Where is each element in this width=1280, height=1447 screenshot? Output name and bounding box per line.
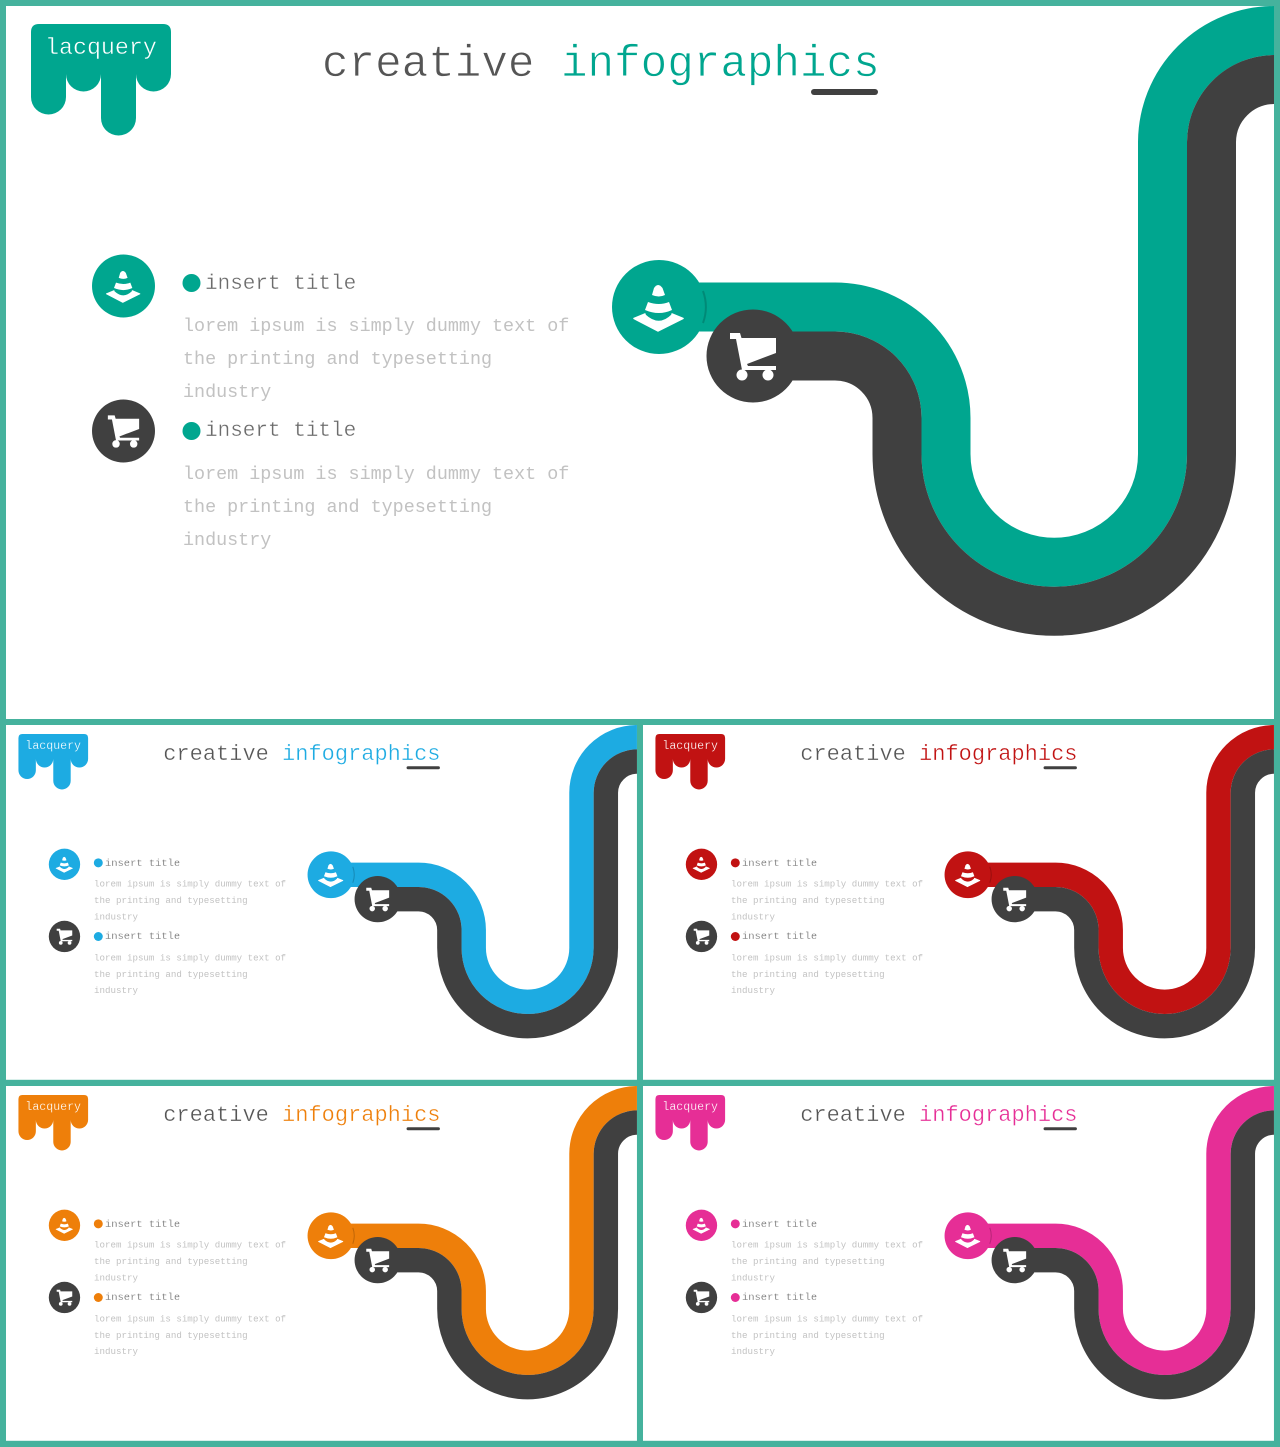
text block 1: the printing and typesetting	[94, 895, 248, 906]
panel: pink	[643, 1086, 1280, 1441]
text block 2: the printing and typesetting	[183, 497, 492, 518]
text block 2: industry	[731, 985, 775, 996]
logo: red: lacquery	[662, 740, 718, 753]
title: creative infographics	[163, 742, 441, 767]
title underline	[1044, 766, 1077, 769]
logo: teal: lacquery	[45, 35, 157, 61]
logo: orange	[18, 1095, 88, 1150]
logo: blue: lacquery	[25, 740, 81, 753]
icon: cone	[49, 1210, 80, 1241]
chart: winding road	[308, 737, 645, 1026]
icon: cone	[686, 1210, 717, 1241]
text block 2: lorem ipsum is simply dummy text of	[731, 952, 923, 963]
heading: insert title 2: insert title	[742, 931, 817, 943]
text block 1: the printing and typesetting	[94, 1256, 248, 1267]
panel: red	[643, 725, 1280, 1080]
heading: insert title 2: insert title	[205, 420, 356, 443]
heading: insert title 2: insert title	[742, 1292, 817, 1304]
icon: cart	[92, 400, 155, 462]
logo: pink: lacquery	[662, 1101, 718, 1114]
text block 2: lorem ipsum is simply dummy text of	[731, 1313, 923, 1324]
text block 1: the printing and typesetting	[731, 1256, 885, 1267]
icon: cart	[49, 1282, 80, 1313]
logo: red	[655, 734, 725, 789]
text block 2: industry	[94, 1346, 138, 1357]
icon: cart	[49, 921, 80, 952]
text block 1: industry	[731, 1273, 775, 1284]
heading: insert title 1: insert title	[105, 858, 180, 870]
text block 1: lorem ipsum is simply dummy text of	[731, 879, 923, 890]
icon: cone	[92, 254, 155, 318]
text block 1: industry	[731, 912, 775, 923]
panel: blue	[6, 725, 645, 1080]
text block 1: lorem ipsum is simply dummy text of	[94, 879, 286, 890]
logo: blue	[18, 734, 88, 789]
text block 1: industry	[94, 912, 138, 923]
title: creative infographics	[800, 742, 1078, 767]
logo: teal	[31, 24, 171, 136]
heading: insert title 1: insert title	[205, 273, 356, 296]
text block 2: lorem ipsum is simply dummy text of	[183, 464, 569, 485]
text block 1: lorem ipsum is simply dummy text of	[94, 1240, 286, 1251]
text block 1: the printing and typesetting	[183, 349, 492, 370]
heading: insert title 2: insert title	[105, 1292, 180, 1304]
heading: insert title 1: insert title	[105, 1219, 180, 1231]
title underline	[811, 89, 878, 95]
text block 1: industry	[183, 382, 271, 403]
text block 1: lorem ipsum is simply dummy text of	[731, 1240, 923, 1251]
title: creative infographics	[800, 1103, 1078, 1128]
heading: insert title 1: insert title	[742, 858, 817, 870]
title underline	[407, 766, 440, 769]
text block 2: lorem ipsum is simply dummy text of	[94, 1313, 286, 1324]
icon: cone	[49, 849, 80, 880]
text block 1: the printing and typesetting	[731, 895, 885, 906]
text block 2: industry	[94, 985, 138, 996]
text block 1: lorem ipsum is simply dummy text of	[183, 316, 569, 337]
title underline	[407, 1127, 440, 1130]
text block 1: industry	[94, 1273, 138, 1284]
chart: winding road	[612, 30, 1280, 611]
text block 2: the printing and typesetting	[94, 1330, 248, 1341]
title: creative infographics	[322, 40, 880, 90]
heading: insert title 2: insert title	[105, 931, 180, 943]
icon: cart	[686, 921, 717, 952]
text block 2: the printing and typesetting	[731, 969, 885, 980]
title underline	[1044, 1127, 1077, 1130]
panel: teal large	[6, 6, 1280, 719]
icon: cone	[686, 849, 717, 880]
text block 2: lorem ipsum is simply dummy text of	[94, 952, 286, 963]
text block 2: the printing and typesetting	[731, 1330, 885, 1341]
chart: winding road	[308, 1098, 645, 1387]
chart: winding road	[945, 1098, 1280, 1387]
text block 2: industry	[183, 530, 271, 551]
icon: cart	[686, 1282, 717, 1313]
logo: orange: lacquery	[25, 1101, 81, 1114]
title: creative infographics	[163, 1103, 441, 1128]
text block 2: the printing and typesetting	[94, 969, 248, 980]
chart: winding road	[945, 737, 1280, 1026]
panel: orange	[6, 1086, 645, 1441]
heading: insert title 1: insert title	[742, 1219, 817, 1231]
logo: pink	[655, 1095, 725, 1150]
text block 2: industry	[731, 1346, 775, 1357]
